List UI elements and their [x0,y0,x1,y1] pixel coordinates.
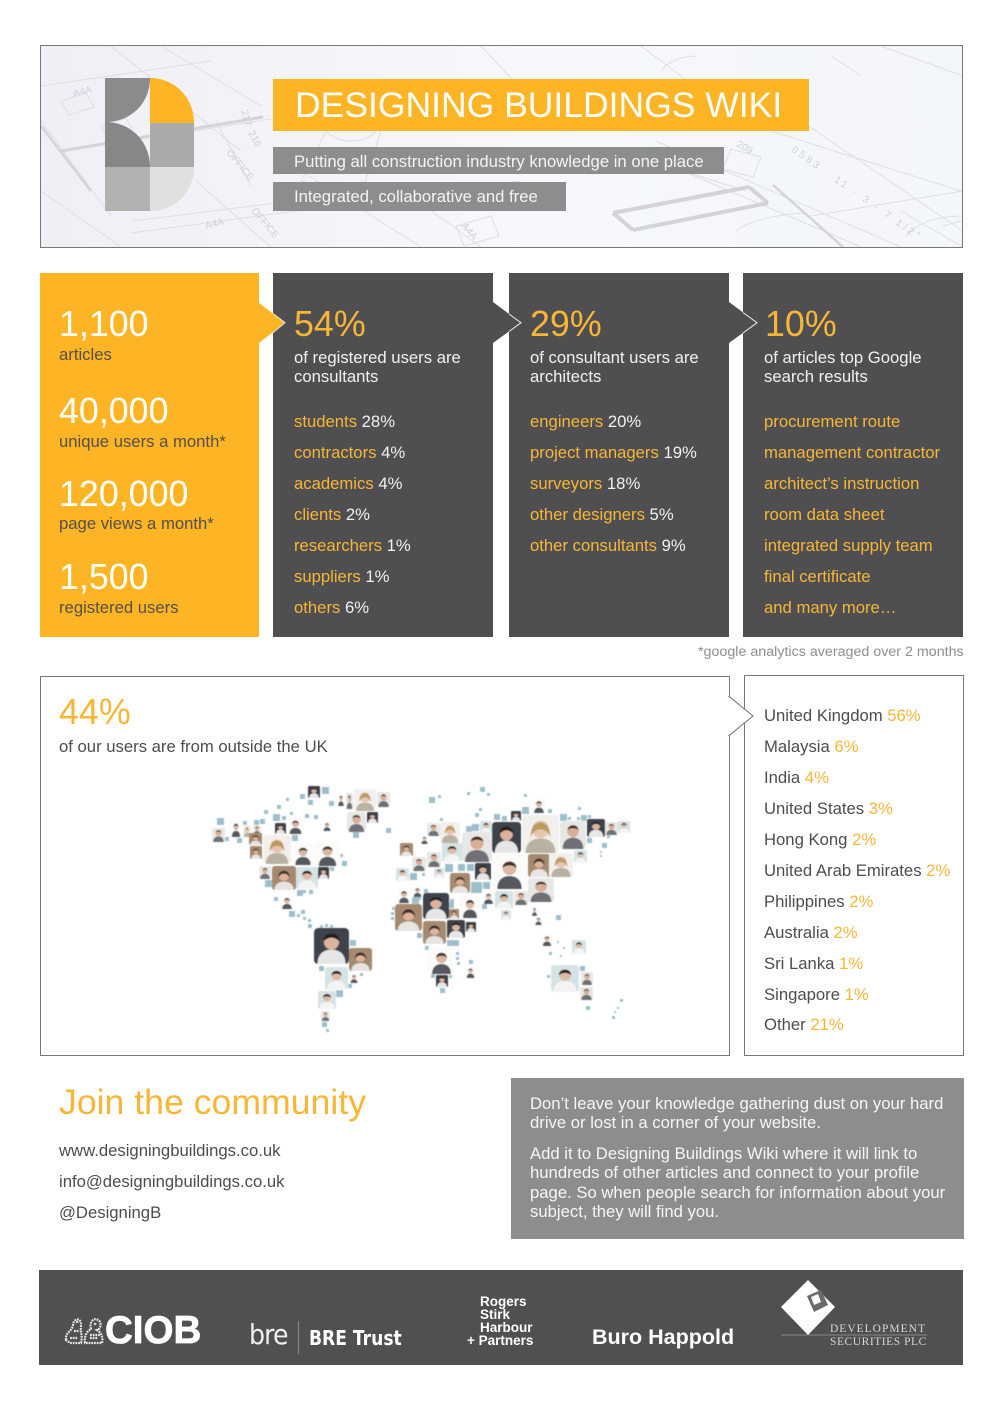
panel: world map and outside UK share [40,676,730,1056]
stat: registered users [59,557,179,617]
subtitle: one place: Putting all construction industry knowledge in one place [294,152,704,171]
description: of our users are from outside the UK [59,737,328,756]
list: countries: Hong Kong 2% [764,830,876,849]
stat: unique users: unique users a month* [59,432,226,451]
blueprint background: A4A [204,217,225,232]
blueprint background: A4A [459,221,479,243]
logo: Development Securities [781,1280,927,1348]
list: consultant types: engineers 20% [530,412,641,431]
list: consultant types: other consultants 9% [530,536,686,555]
list: countries: India 4% [764,768,829,787]
subtitle: integrated: Integrated, collaborative and free [294,187,538,206]
logo: BRE Trust [249,1318,402,1354]
logo: Rogers Stirk Harbour + Partners: + Partners [467,1333,533,1348]
list: article topics: procurement route [764,412,900,431]
list: countries [764,706,950,1034]
blueprint background: OFFICE [224,148,256,183]
stat: articles: 1,100 [59,304,149,344]
list: article topics [764,412,940,617]
company name: DEVELOPMENT [830,1323,926,1335]
panel: country list [744,675,964,1056]
footer sponsors band [39,1270,963,1365]
paragraph one: drive or lost in a corner of your website. [530,1113,821,1132]
logo: Rogers Stirk Harbour + Partners: Rogers [480,1294,527,1309]
panel: google results [743,273,963,637]
list: user types: academics 4% [294,474,402,493]
stat: articles [59,304,149,364]
list: countries: Singapore 1% [764,985,869,1004]
stat: unique users [59,391,226,451]
list: countries: Philippines 2% [764,892,873,911]
title [273,79,809,131]
blueprint background: A4A [72,85,93,100]
blue pixel squares [217,787,623,1032]
paragraph two: page. So when people search for information about your [530,1183,945,1202]
description: search results [764,367,868,386]
stat: page views [59,474,214,533]
blueprint background: OFFICE [249,206,281,241]
percentage: 54%: 54% [294,304,366,344]
blueprint background: 217 [238,109,254,128]
percentage: 44%: 44% [59,692,131,732]
company name [830,1323,927,1348]
heading: join the community: Join the community [59,1082,366,1122]
panel: registered users [273,273,493,637]
paragraph one [530,1094,943,1132]
paragraph two: hundreds of other articles and connect to your profile [530,1163,919,1182]
paragraph two: Add it to Designing Buildings Wiki where it will link to [530,1144,917,1163]
description: architects [530,367,601,386]
title: DESIGNING BUILDINGS WIKI [295,85,782,125]
stat: unique users: 40,000 [59,391,168,431]
panel: headline statistics [40,273,259,637]
BRE Trust wordmark: BRE Trust [309,1326,402,1350]
blueprint background [41,46,962,247]
description: of registered users are [294,348,461,367]
blueprint background: 0583 · 11 · 3 · 7 1/2" [789,144,924,243]
stat: articles: articles [59,345,112,364]
list: consultant types: other designers 5% [530,505,674,524]
arrow: first to second dark panel [493,302,522,343]
logo: CIOB: CIOB [105,1309,201,1352]
list: consultant types: project managers 19% [530,443,697,462]
list: article topics: integrated supply team [764,536,933,555]
stat: page views: 120,000 [59,474,188,514]
contact details [59,1141,284,1222]
subtitle: one place [273,147,724,174]
list: consultant types [530,412,697,555]
arrow: yellow to first dark panel [259,303,286,343]
list: user types: students 28% [294,412,395,431]
paragraph two [530,1144,945,1221]
logo: Buro Happold: Buro Happold [592,1325,734,1349]
list: article topics: room data sheet [764,505,884,524]
percentage: 10%: 10% [765,304,837,344]
description [530,348,699,386]
list: countries: Other 21% [764,1015,844,1034]
description: consultants [294,367,378,386]
world map made of portrait tiles [212,785,630,1032]
bre wordmark: bre [249,1318,288,1351]
footnote: *google analytics averaged over 2 months [698,644,964,660]
list: user types: clients 2% [294,505,370,524]
list: countries: Sri Lanka 1% [764,954,863,973]
list: user types [294,412,411,617]
list: user types: others 6% [294,598,369,617]
stat: registered users: registered users [59,598,179,617]
list: article topics: architect’s instruction [764,474,919,493]
list: consultant types: surveyors 18% [530,474,640,493]
list: countries: Australia 2% [764,923,858,942]
panel: call to action [511,1078,964,1239]
list: user types: suppliers 1% [294,567,389,586]
stat: page views: page views a month* [59,514,214,533]
logo: Rogers Stirk Harbour + Partners [467,1294,533,1348]
logo: Rogers Stirk Harbour + Partners: Stirk [480,1307,510,1322]
list: countries: United Kingdom 56% [764,706,921,725]
description [294,348,461,386]
panel: consultant users [509,273,729,637]
stat: registered users: 1,500 [59,557,149,597]
icon: diamond crest [781,1280,927,1336]
icon: CIOB lion crest [64,1318,104,1344]
list: user types: contractors 4% [294,443,405,462]
portrait tiles [212,786,630,1021]
paragraph one: Don’t leave your knowledge gathering dust on your hard [530,1094,943,1113]
list: user types: researchers 1% [294,536,411,555]
divider [298,1321,299,1354]
logo: Rogers Stirk Harbour + Partners: Harbour [480,1320,533,1335]
description [764,348,922,386]
company name: SECURITIES PLC [830,1336,927,1348]
description: of articles top Google [764,348,922,367]
arrow: map panel to country list [728,696,754,736]
list: article topics: and many more… [764,598,897,617]
contact details: @DesigningB [59,1203,161,1222]
logo: Designing Buildings D mark [105,78,194,211]
arrow: second to third dark panel [729,302,758,343]
subtitle: integrated [273,182,566,211]
blueprint background: 209 [734,139,755,157]
description: of consultant users are [530,348,699,367]
percentage: 29%: 29% [530,304,602,344]
list: countries: Malaysia 6% [764,737,859,756]
header banner [40,45,963,248]
contact details: www.designingbuildings.co.uk [59,1141,280,1160]
paragraph two: subject, they will find you. [530,1202,719,1221]
list: countries: United Arab Emirates 2% [764,861,950,880]
list: article topics: management contractor [764,443,940,462]
blueprint background: 216 [245,129,263,149]
contact details: info@designingbuildings.co.uk [59,1172,284,1191]
list: countries: United States 3% [764,799,893,818]
list: article topics: final certificate [764,567,871,586]
